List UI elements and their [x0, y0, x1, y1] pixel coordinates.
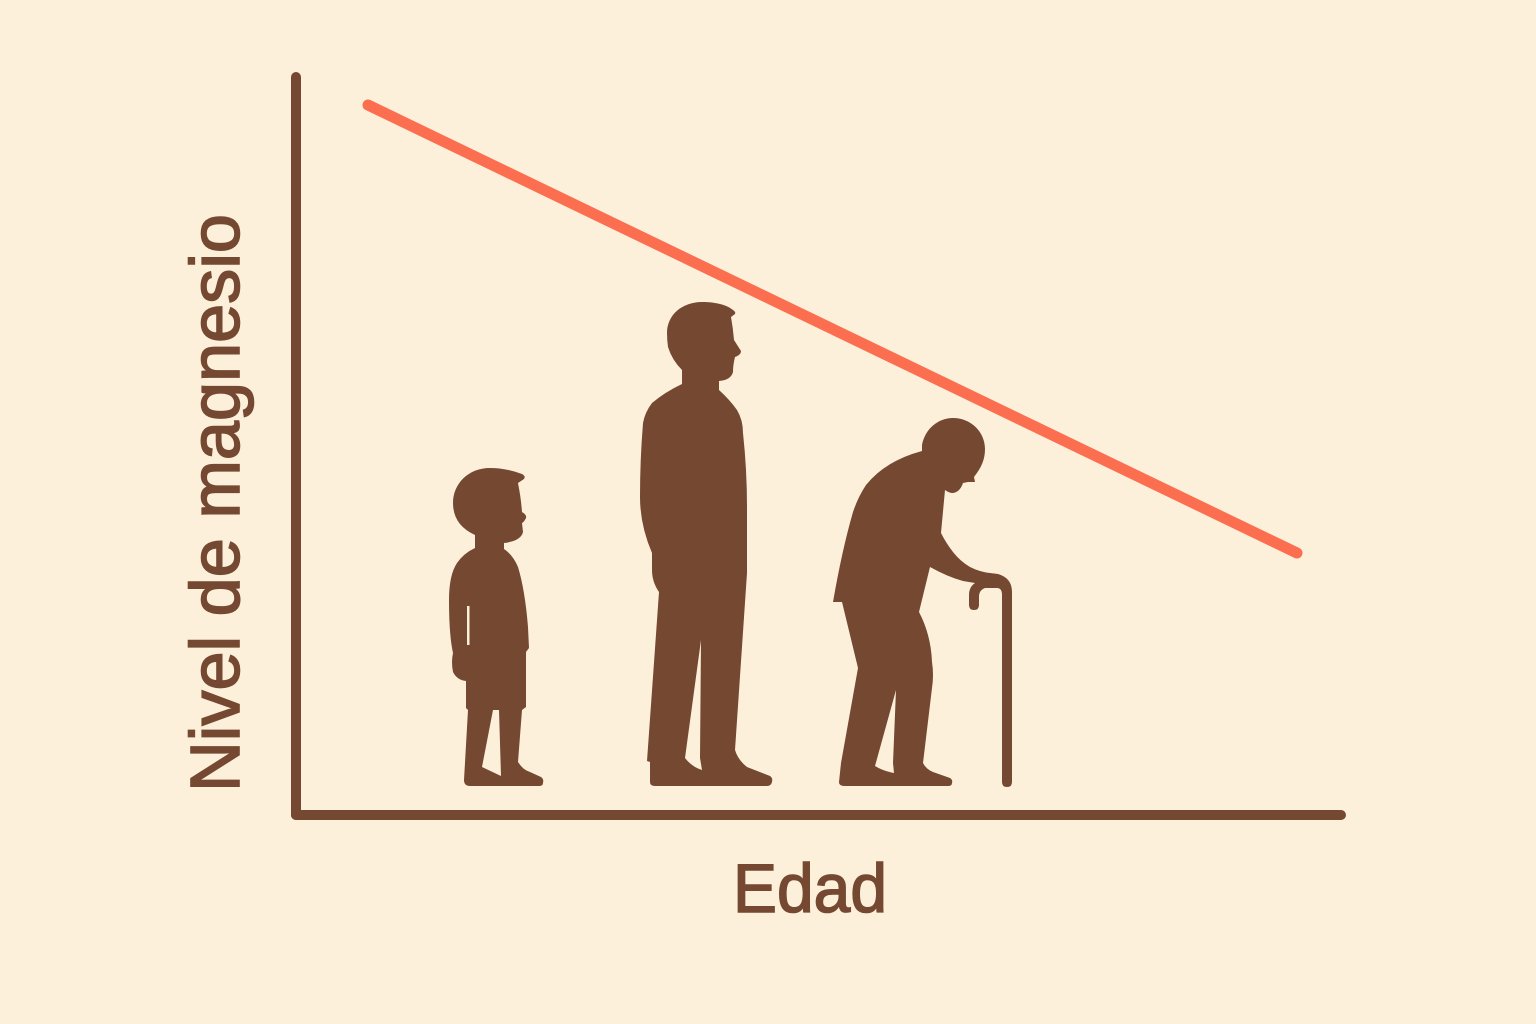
x axis label: Edad — [733, 850, 887, 927]
icon: child silhouette — [449, 468, 543, 786]
y axis — [291, 77, 301, 815]
icon: elderly silhouette with cane — [833, 418, 1012, 787]
y axis label: Nivel de magnesio — [176, 214, 254, 792]
x axis — [296, 810, 1341, 820]
declining trend line — [368, 105, 1297, 553]
icon: adult silhouette — [640, 302, 772, 786]
